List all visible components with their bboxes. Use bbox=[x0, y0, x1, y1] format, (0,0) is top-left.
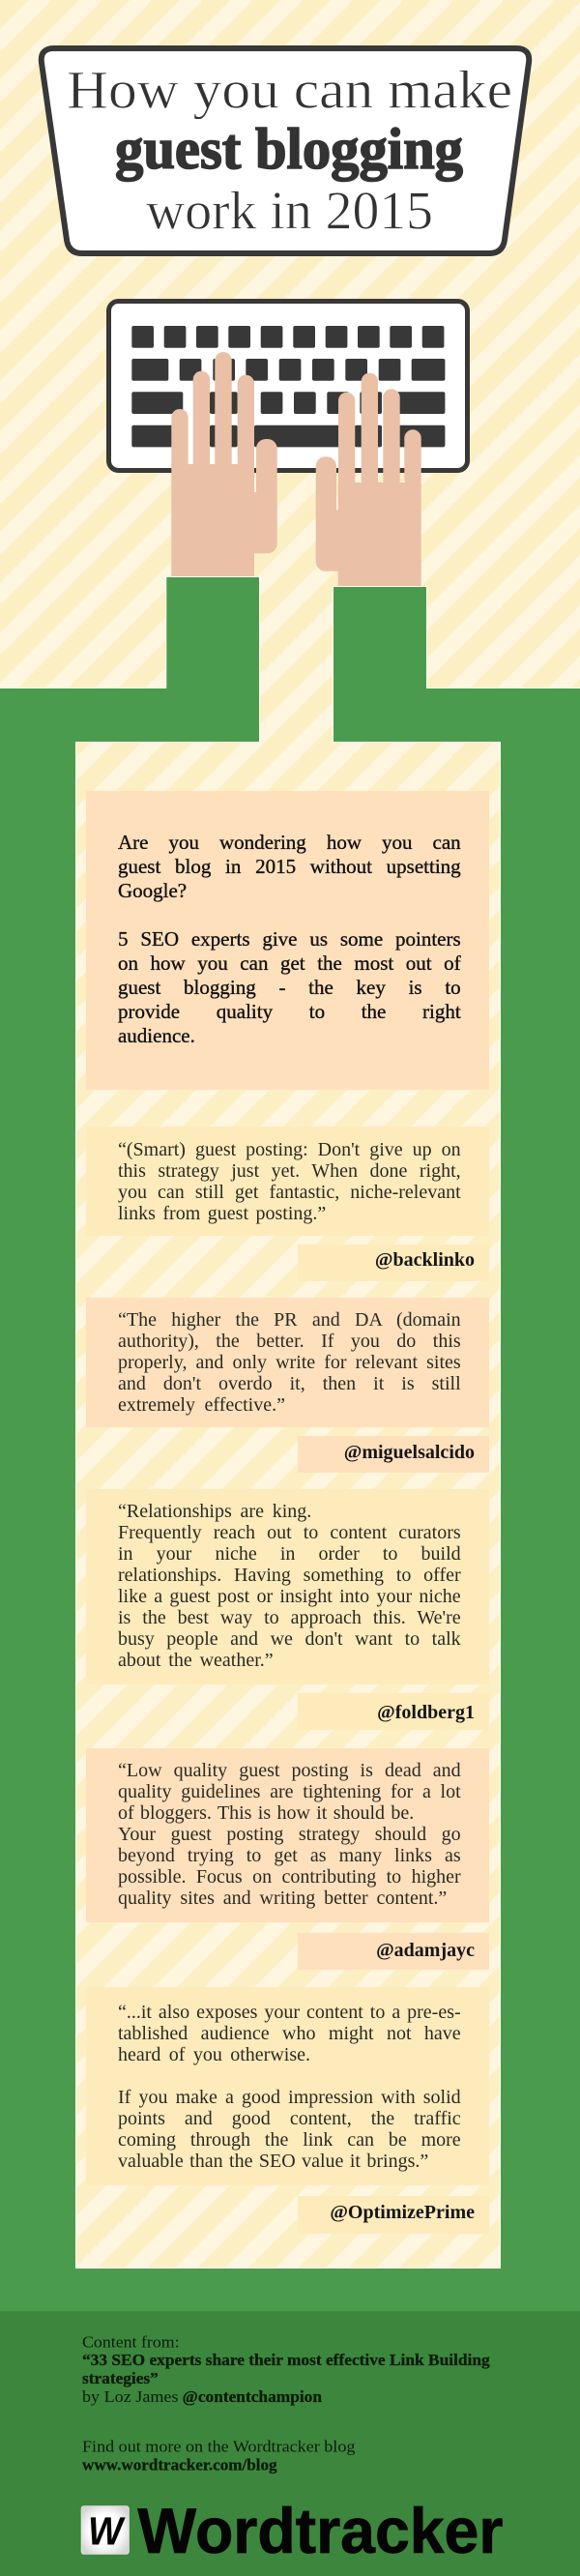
handle: miguelsalcido: @miguelsalcido bbox=[344, 1442, 475, 1463]
quote 2: authority), the better. If you do this bbox=[118, 1331, 461, 1352]
quote 1: this strategy just yet. When done right, bbox=[118, 1160, 461, 1182]
intro panel bbox=[86, 791, 489, 1090]
quote 4: quality guidelines are tightening for a lot bbox=[118, 1781, 461, 1802]
footer band: Content from: bbox=[82, 2333, 180, 2352]
intro panel: provide quality to the right bbox=[118, 1000, 461, 1023]
quote 2: and don't overdo it, then it is still bbox=[118, 1373, 461, 1394]
handle: backlinko bbox=[298, 1244, 489, 1281]
quote 3: “Relationships are king. bbox=[118, 1501, 311, 1522]
title plaque: guest blogging bbox=[115, 117, 463, 181]
quote 3: is the best way to approach this. We're bbox=[118, 1607, 461, 1628]
quote 3: busy people and we don't want to talk bbox=[118, 1628, 461, 1650]
footer band: “33 SEO experts share their most effective Link Building bbox=[82, 2351, 490, 2369]
title plaque: work in 2015 bbox=[146, 182, 433, 242]
handle: foldberg1: @foldberg1 bbox=[377, 1702, 475, 1723]
quote 2: “The higher the PR and DA (domain bbox=[118, 1309, 461, 1331]
intro panel: on how you can get the most out of bbox=[118, 951, 461, 975]
green sleeves and frame bbox=[0, 577, 580, 2311]
quote 5: heard of you otherwise. bbox=[118, 2044, 310, 2065]
quote 2: extremely effective.” bbox=[118, 1394, 285, 1416]
intro panel: Google? bbox=[118, 879, 187, 902]
intro panel: guest blogging - the key is to bbox=[118, 976, 461, 999]
quote 4 bbox=[86, 1748, 489, 1922]
quote 2 bbox=[86, 1298, 489, 1427]
footer band: www.wordtracker.com/blog bbox=[82, 2456, 277, 2474]
handle: OptimizePrime: @OptimizePrime bbox=[330, 2202, 475, 2223]
quote 4: “Low quality guest posting is dead and bbox=[118, 1760, 461, 1781]
quote 5: coming through the link can be more bbox=[118, 2129, 461, 2151]
quote 4: quality sites and writing better content.” bbox=[118, 1888, 447, 1909]
handle: backlinko: @backlinko bbox=[375, 1249, 475, 1271]
quote 4: beyond trying to get as many links as bbox=[118, 1845, 461, 1866]
quote 5: tablished audience who might not have bbox=[118, 2023, 461, 2044]
quote 2: properly, and only write for relevant sites bbox=[118, 1352, 461, 1373]
handle: adamjayc bbox=[298, 1933, 489, 1970]
quote 5: “...it also exposes your content to a pre-es- bbox=[118, 2002, 461, 2023]
quote 1: links from guest posting.” bbox=[118, 1203, 326, 1224]
title plaque: How you can make bbox=[67, 61, 512, 121]
quote 3: in your niche in order to build bbox=[118, 1543, 461, 1565]
quote 3: Frequently reach out to content curators bbox=[118, 1522, 461, 1543]
quote 1: “(Smart) guest posting: Don't give up on bbox=[118, 1139, 461, 1160]
quote 3 bbox=[86, 1489, 489, 1684]
footer band: Find out more on the Wordtracker blog bbox=[82, 2438, 356, 2456]
wordtracker wordmark: Wordtracker bbox=[137, 2495, 503, 2566]
handle: adamjayc: @adamjayc bbox=[376, 1940, 475, 1961]
quote 1: you can still get fantastic, niche-relevant bbox=[118, 1182, 461, 1203]
intro panel: 5 SEO experts give us some pointers bbox=[118, 927, 461, 951]
quote 3: relationships. Having something to offer bbox=[118, 1565, 461, 1586]
quote 5: points and good content, the traffic bbox=[118, 2108, 461, 2129]
intro panel: audience. bbox=[118, 1024, 195, 1047]
keyboard bbox=[108, 302, 468, 470]
intro panel: guest blog in 2015 without upsetting bbox=[118, 855, 461, 878]
handle: miguelsalcido bbox=[298, 1436, 489, 1473]
handle: foldberg1 bbox=[298, 1693, 489, 1730]
left hand bbox=[171, 352, 277, 578]
quote 5 bbox=[86, 1987, 489, 2185]
footer band: by Loz James bbox=[82, 2387, 178, 2406]
handle: OptimizePrime bbox=[298, 2196, 489, 2234]
quote 1 bbox=[86, 1127, 489, 1236]
footer band: @contentchampion bbox=[183, 2387, 323, 2406]
quote 4: Your guest posting strategy should go bbox=[118, 1824, 461, 1845]
quote 4: of bloggers. This is how it should be. bbox=[118, 1802, 414, 1824]
icon: wordtracker W: W bbox=[88, 2509, 126, 2554]
intro panel: Are you wondering how you can bbox=[118, 831, 461, 854]
quote 3: like a guest post or insight into your niche bbox=[118, 1586, 461, 1607]
footer band bbox=[0, 2311, 580, 2576]
quote 3: about the weather.” bbox=[118, 1650, 274, 1671]
quote 4: possible. Focus on contributing to higher bbox=[118, 1866, 461, 1888]
footer band: strategies” bbox=[82, 2369, 159, 2387]
title plaque bbox=[42, 48, 529, 253]
right hand bbox=[316, 373, 421, 588]
quote 5: If you make a good impression with solid bbox=[118, 2087, 461, 2108]
quote 5: valuable than the SEO value it brings.” bbox=[118, 2151, 428, 2172]
